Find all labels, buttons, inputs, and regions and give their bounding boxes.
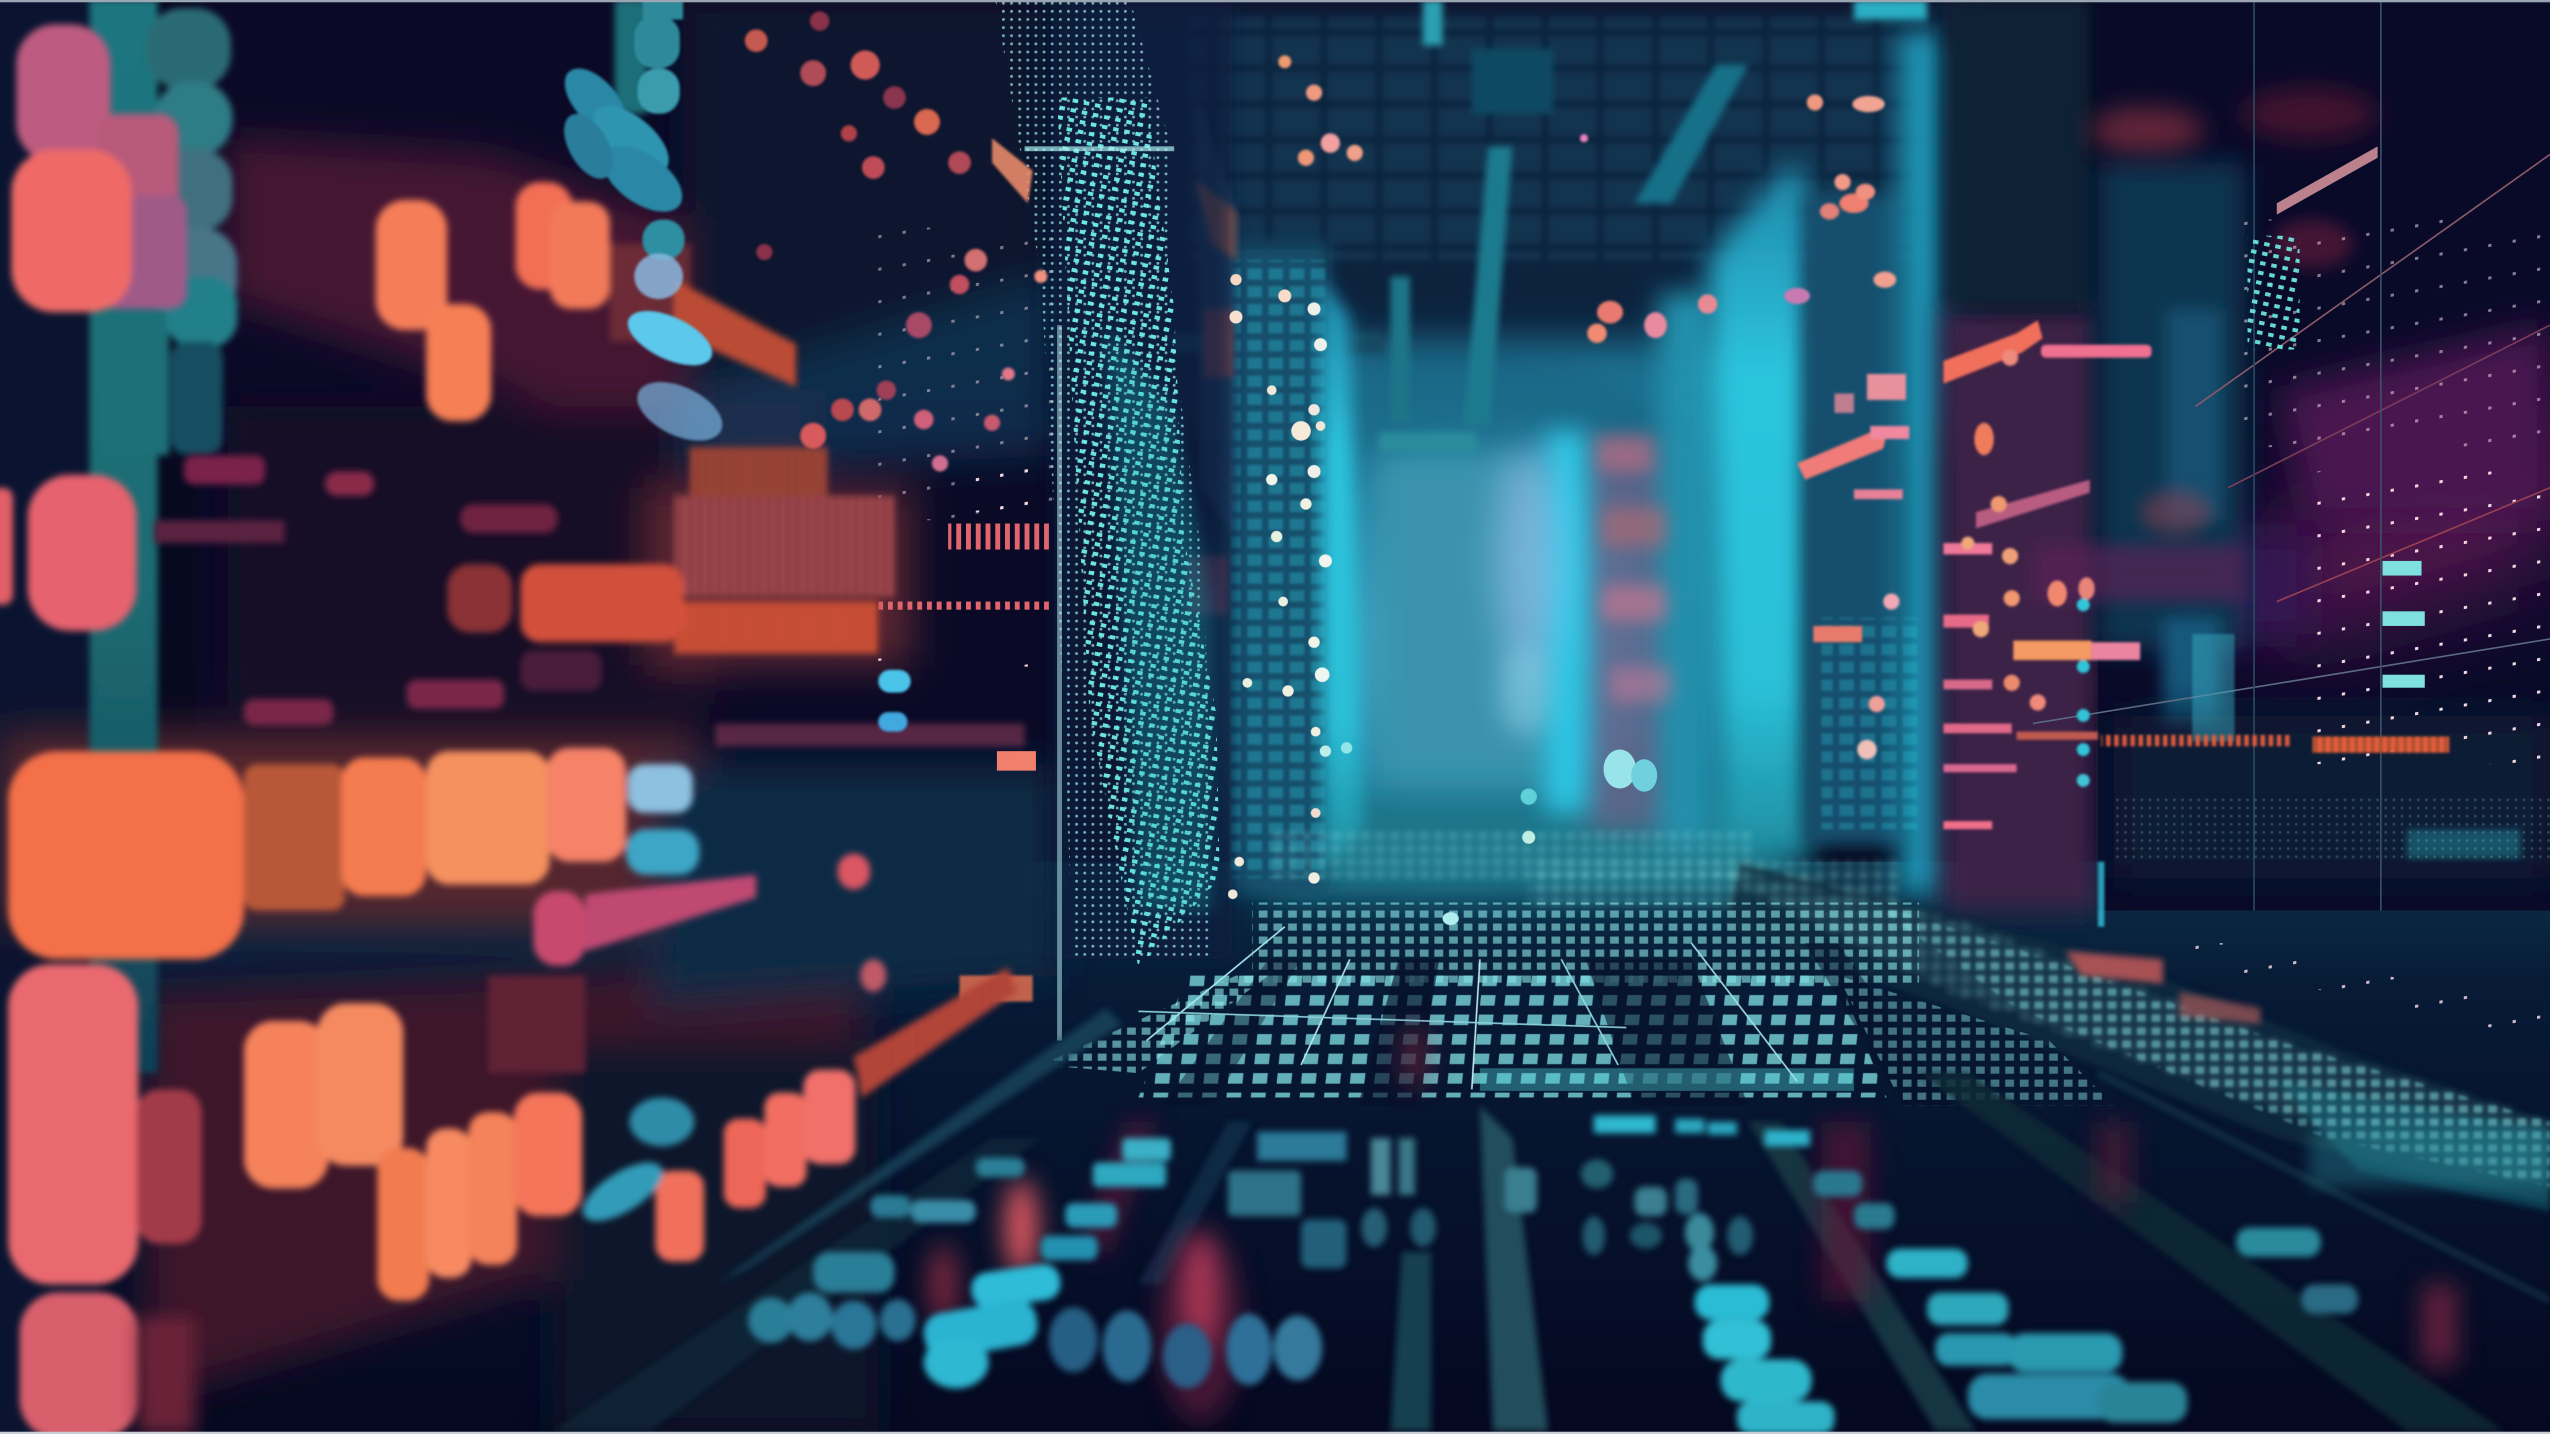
center glow and tunnel haze: [1057, 0, 1968, 951]
left wall teal column and blobs: [89, 0, 647, 1073]
floor data grid: [1041, 902, 2114, 1106]
ceiling structures: [1171, 0, 2049, 452]
right tunnel wall columns: [1496, 0, 2098, 910]
left inner tunnel wall: [1187, 98, 1363, 894]
left wall tinted shadows: [0, 0, 1057, 1431]
upper left blue blobs: [553, 0, 911, 732]
glowing white dots on tunnel wall: [1228, 274, 1537, 899]
floor red reflections: [930, 1024, 2456, 1423]
floor glowing cyan blobs: [748, 1115, 2358, 1434]
floor horizon haze: [1268, 829, 2550, 1211]
right far wall: [2033, 0, 2550, 910]
right wall bars and dots: [1587, 94, 2449, 927]
upper middle salmon bokeh: [745, 11, 1588, 471]
floor right data clusters: [1870, 797, 2550, 1187]
particle data wave: [716, 0, 1233, 1041]
floor perspective strips: [553, 1008, 2550, 1431]
left wall orange and pink bokeh: [0, 24, 1016, 1434]
